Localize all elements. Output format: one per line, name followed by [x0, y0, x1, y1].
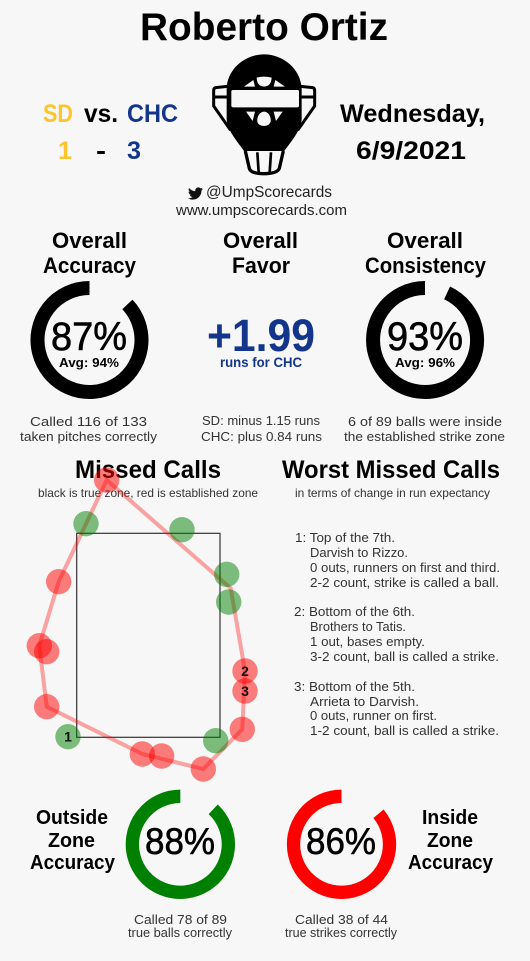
call 2	[294, 604, 499, 664]
twitter handle: @UmpScorecards	[206, 184, 332, 201]
subheading: black is true zone, red is established zone	[38, 486, 258, 500]
team: SD: SD	[43, 100, 73, 128]
date	[340, 100, 485, 165]
subheading: in terms of change in run expectancy	[295, 486, 490, 500]
call number labels: 3	[241, 683, 249, 699]
call 2: 2: Bottom of the 6th.	[294, 604, 415, 619]
title: Roberto Ortiz	[140, 6, 388, 49]
social handle and website	[175, 184, 347, 219]
website: www.umpscorecards.com	[175, 202, 347, 219]
panel: overall accuracy	[20, 228, 158, 444]
call 2: 1 out, bases empty.	[310, 634, 425, 649]
caption: 6 of 89 balls were inside	[348, 414, 502, 429]
vs label: vs.	[84, 100, 118, 128]
ring: accuracy 87%	[37, 288, 141, 392]
game date: 6/9/2021	[356, 137, 466, 165]
call 1: Darvish to Rizzo.	[310, 545, 408, 560]
call 2: 3-2 count, ball is called a strike.	[310, 649, 499, 664]
call 1: 2-2 count, strike is called a ball.	[310, 575, 499, 590]
value: +1.99	[207, 310, 315, 361]
call 3: 3: Bottom of the 5th.	[294, 679, 415, 694]
label: Accuracy	[30, 852, 116, 874]
panel: inside zone accuracy	[285, 796, 494, 940]
panel: outside zone accuracy	[30, 796, 233, 940]
call 3: Arrieta to Darvish.	[310, 694, 419, 709]
icon: twitter bird	[188, 187, 203, 200]
caption: SD: minus 1.15 runs	[202, 413, 320, 428]
label	[408, 807, 494, 874]
heading	[365, 228, 487, 278]
panel: worst missed calls	[282, 456, 500, 738]
established zone outline	[39, 480, 245, 769]
chart: strike zone plot	[27, 467, 258, 782]
label	[30, 807, 116, 874]
heading: Consistency	[365, 253, 487, 278]
label: Accuracy	[408, 852, 494, 874]
ring: outside 88%	[132, 796, 228, 892]
label: Inside	[422, 807, 478, 829]
label: Outside	[36, 807, 108, 829]
panel: overall consistency	[344, 228, 505, 444]
caption: CHC: plus 0.84 runs	[201, 429, 323, 444]
weekday: Wednesday,	[340, 100, 485, 128]
heading: Favor	[232, 253, 290, 278]
heading: Overall	[52, 228, 127, 253]
call 1: 1: Top of the 7th.	[295, 530, 395, 545]
caption	[344, 414, 505, 444]
caption	[20, 414, 158, 444]
value: 93%	[387, 315, 463, 359]
caption: true balls correctly	[128, 926, 233, 940]
value: 87%	[51, 315, 127, 359]
average: Avg: 96%	[395, 355, 455, 370]
call 3: 0 outs, runner on first.	[310, 708, 437, 723]
call 3: 1-2 count, ball is called a strike.	[310, 723, 499, 738]
favored team: runs for CHC	[220, 354, 302, 370]
heading	[43, 228, 137, 278]
panel: overall favor	[201, 228, 323, 444]
caption	[201, 413, 323, 444]
caption	[285, 913, 398, 940]
caption	[128, 913, 233, 940]
heading: Worst Missed Calls	[282, 456, 500, 484]
caption: Called 38 of 44	[295, 913, 388, 927]
call number labels	[64, 663, 249, 744]
score dash: -	[96, 137, 106, 165]
caption: the established strike zone	[344, 429, 505, 444]
CHC score: 3	[127, 137, 141, 165]
heading: Overall	[387, 228, 463, 253]
call 1: 0 outs, runners on first and third.	[310, 560, 500, 575]
heading: Missed Calls	[75, 456, 221, 484]
value: 86%	[306, 821, 376, 862]
ring: inside 86%	[294, 796, 390, 892]
red missed calls	[27, 467, 258, 782]
call 3	[294, 679, 499, 738]
call number labels: 2	[241, 663, 249, 679]
caption: taken pitches correctly	[20, 429, 158, 444]
call 1	[295, 530, 500, 590]
ring: consistency 93%	[373, 288, 477, 392]
label: Zone	[48, 830, 95, 852]
average: Avg: 94%	[59, 355, 119, 370]
heading	[223, 228, 298, 278]
heading: Overall	[223, 228, 298, 253]
team: CHC: CHC	[127, 100, 178, 128]
caption: true strikes correctly	[285, 926, 398, 940]
caption: Called 78 of 89	[134, 913, 227, 927]
call number labels: 1	[64, 728, 72, 744]
correct-side missed calls	[55, 511, 241, 753]
true strike zone	[77, 533, 220, 737]
heading: Accuracy	[43, 253, 137, 278]
call 2: Brothers to Tatis.	[310, 619, 406, 634]
SD score: 1	[58, 137, 72, 165]
caption: Called 116 of 133	[30, 414, 147, 429]
matchup and score	[43, 100, 178, 165]
panel: missed calls	[27, 456, 258, 782]
value: 88%	[145, 821, 215, 862]
icon: umpire mask	[214, 54, 315, 174]
label: Zone	[427, 830, 473, 852]
